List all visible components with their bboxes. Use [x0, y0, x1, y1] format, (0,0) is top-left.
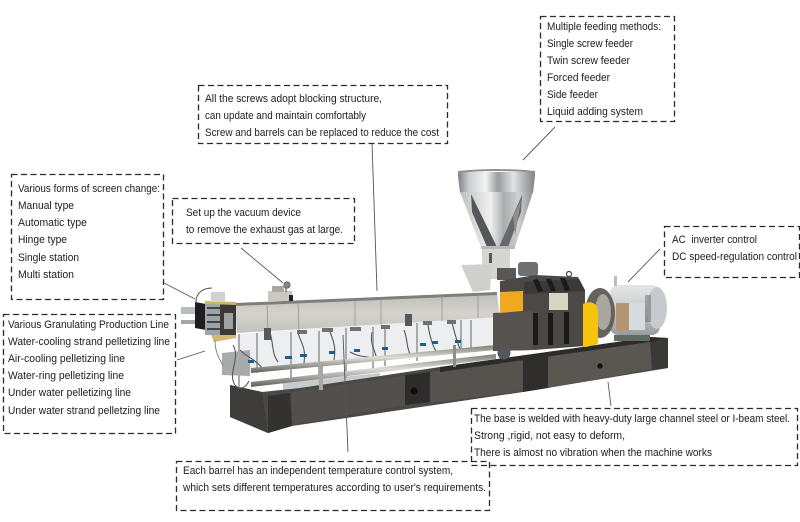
gearbox	[493, 272, 585, 360]
callout: screen change: Various forms of screen change:	[18, 183, 160, 195]
callout: base: There is almost no vibration when the machine works	[474, 447, 712, 459]
callout: feeding methods: Single screw feeder	[547, 38, 633, 50]
callout: granulating lines: Under water strand pelletzing line	[8, 405, 160, 417]
motor	[585, 276, 667, 341]
callout: motor control	[664, 226, 800, 278]
yellow coupling guard	[583, 302, 598, 347]
callout: feeding methods: Liquid adding system	[547, 106, 643, 118]
barrel housing	[235, 292, 500, 340]
frame backdrop behind barrel	[222, 316, 498, 392]
callout: screws: can update and maintain comfortably	[205, 110, 366, 122]
callout: granulating lines: Water-ring pelletizing line	[8, 370, 124, 382]
callout: temperature control: Each barrel has an independent temperature control system,	[183, 465, 453, 477]
callout: granulating lines	[4, 314, 176, 434]
callout: screen change	[12, 174, 164, 300]
callout: granulating lines: Air-cooling pelletizing line	[8, 353, 125, 365]
machine: twin screw extruder	[181, 169, 668, 433]
feed throat and side feeder	[461, 249, 538, 292]
callout: screen change: Automatic type	[18, 217, 87, 229]
screen changer	[181, 288, 236, 366]
callout: vacuum device	[172, 198, 354, 244]
steel base	[230, 337, 668, 433]
callout: feeding methods: Side feeder	[547, 89, 598, 101]
callout: screen change: Multi station	[18, 269, 74, 281]
callout: feeding methods: Multiple feeding methods:	[547, 21, 661, 33]
callout: temperature control	[176, 462, 490, 510]
leader lines	[164, 127, 660, 452]
callout: base	[472, 408, 798, 466]
callout: screws: Screw and barrels can be replaced to reduce the cost	[205, 127, 440, 139]
callout: motor control: AC inverter control	[672, 234, 757, 246]
callout: screws	[198, 86, 448, 144]
callout: granulating lines: Under water pelletizing line	[8, 387, 131, 399]
callout: feeding methods	[540, 16, 674, 122]
hopper	[458, 169, 535, 249]
vacuum device with gauge	[268, 282, 293, 301]
callout: screws: All the screws adopt blocking structure,	[205, 93, 382, 105]
callout: vacuum device: Set up the vacuum device	[186, 207, 301, 219]
callout: vacuum device: to remove the exhaust gas at large.	[186, 224, 343, 236]
callout: feeding methods: Twin screw feeder	[547, 55, 630, 67]
callout: granulating lines: Various Granulating Production Line	[8, 319, 169, 331]
callout: feeding methods: Forced feeder	[547, 72, 610, 84]
callout: granulating lines: Water-cooling strand pelletizing line	[8, 336, 170, 348]
callout: temperature control: which sets different temperatures according to user's requirements.	[182, 482, 486, 494]
callout: base: Strong ,rigid, not easy to deform,	[474, 430, 625, 442]
callout: screen change: Manual type	[18, 200, 74, 212]
cooling manifold: pipes, hoses and valves	[232, 320, 496, 390]
callout: screen change: Single station	[18, 252, 79, 264]
callout: screen change: Hinge type	[18, 234, 67, 246]
